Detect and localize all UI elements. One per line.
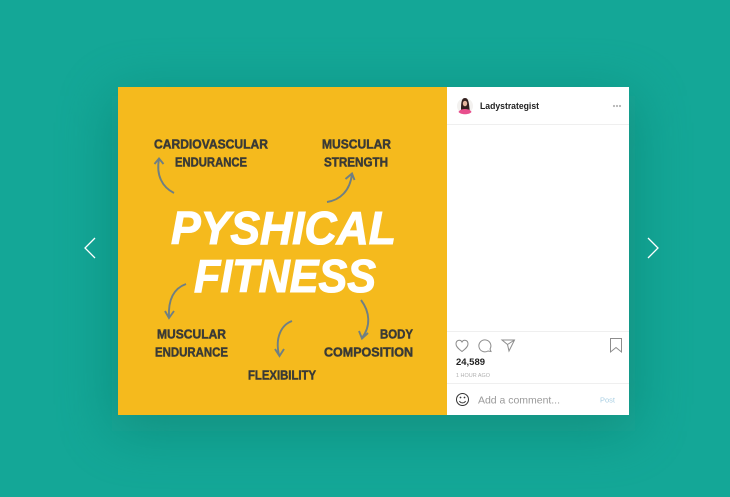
panel: instagram sidebar [447,87,629,415]
icon: previous chevron [85,238,95,258]
title: FITNESS [194,250,376,302]
icon: next chevron [648,238,658,258]
comment input: Add a comment... [478,394,560,406]
arrow: to muscular strength [327,174,354,202]
title [171,202,396,302]
icon: more dots [613,105,621,107]
title: PYSHICAL [171,202,396,254]
icon: heart [456,340,468,352]
likes count: 24,589 [456,357,485,367]
label: muscular endurance: ENDURANCE [155,346,228,360]
icon: smiley [456,394,468,406]
label: cardiovascular endurance [154,138,268,170]
arrow: to muscular endurance [165,284,186,318]
label: body composition [324,328,414,360]
label: cardiovascular endurance: CARDIOVASCULAR [154,138,268,152]
label: muscular strength [322,138,391,170]
label: muscular endurance: MUSCULAR [157,328,226,342]
timestamp: 1 HOUR AGO [456,373,491,379]
label: body composition: BODY [380,328,414,342]
arrow: to cardiovascular endurance [154,158,174,193]
label: muscular endurance [155,328,228,360]
label: cardiovascular endurance: ENDURANCE [175,156,247,170]
arrow: to flexibility [275,321,292,356]
username: Ladystrategist [480,101,540,112]
label: flexibility: FLEXIBILITY [248,368,317,382]
icon: comment [479,340,491,352]
icon: profile avatar [457,98,473,114]
post button: Post [600,396,616,404]
icon: share [502,340,514,351]
label: body composition: COMPOSITION [324,346,413,360]
arrow: to body composition [359,300,368,338]
label: muscular strength: STRENGTH [324,156,388,170]
icon: bookmark [610,338,622,352]
label: muscular strength: MUSCULAR [322,138,391,152]
panel: yellow post image [118,87,447,415]
